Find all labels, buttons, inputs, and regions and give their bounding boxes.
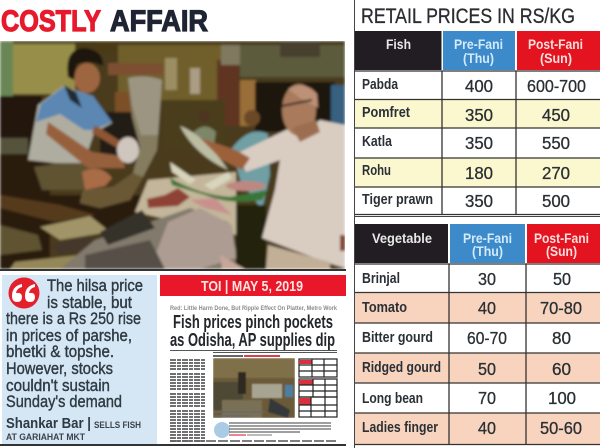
quote panel <box>0 269 346 446</box>
clipping caption <box>214 412 265 416</box>
vegetable table rows: Bitter gourd <box>362 329 433 346</box>
customer head <box>282 84 316 136</box>
big fish on table <box>60 208 236 269</box>
clipping body text column <box>170 360 206 441</box>
vegetable table rows: 60 <box>552 359 571 379</box>
clipping date banner: TOI | MAY 5, 2019 <box>201 278 303 295</box>
vegetable table rows: 50-60 <box>540 418 582 438</box>
fish table header: Post-Fani <box>528 36 583 52</box>
background customers <box>198 110 210 122</box>
vegetable table header: Pre-Fani <box>463 230 512 246</box>
fish table header <box>355 31 600 70</box>
panel: vegetable price table <box>354 216 600 448</box>
floor/slabs <box>0 195 95 222</box>
vegetable table rows <box>355 264 600 445</box>
table <box>135 172 236 235</box>
vegetable table rows: 70-80 <box>540 298 582 318</box>
quote attribution <box>6 415 141 443</box>
vegetable table rows: 80 <box>552 328 571 348</box>
quote attribution: SELLS FISH <box>94 420 141 431</box>
fish table rows: 350 <box>465 105 493 125</box>
fish table rows: 550 <box>542 133 570 153</box>
fish table rows: Rohu <box>362 162 391 179</box>
customer kurta <box>238 120 345 268</box>
vegetable table header <box>355 224 600 263</box>
title <box>1 5 208 38</box>
fish table rows: 400 <box>465 76 493 96</box>
fish table rows: Katla <box>362 133 393 150</box>
seller: arm <box>46 122 125 168</box>
icon: quotation mark <box>8 278 40 308</box>
clipping headline <box>170 311 335 350</box>
fish table rows: Pabda <box>362 76 399 93</box>
quote text: in prices of parshe, <box>6 327 132 345</box>
quote text: couldn't sustain <box>6 377 110 395</box>
clipping mini tables <box>299 359 337 417</box>
vegetable table rows: 40 <box>478 418 496 438</box>
fish table rows: 180 <box>465 163 493 183</box>
vegetable table header: Vegetable <box>372 230 432 246</box>
vegetable table rows: 50 <box>553 269 571 289</box>
fish table rows: 270 <box>542 163 570 183</box>
clipping headline: Fish prices pinch pockets <box>173 311 333 332</box>
vegetable table rows: 50 <box>478 359 496 379</box>
clipping kicker: Red: Little Harm Done, But Ripple Effect On Platter, Metro Work <box>170 305 337 312</box>
fish table rows: Pomfret <box>362 104 410 121</box>
vegetable table header: Post-Fani <box>534 230 589 246</box>
clipping photo <box>213 358 295 418</box>
vegetable table rows: 30 <box>478 269 496 289</box>
seller: shirt <box>28 86 112 163</box>
vegetable table rows: Brinjal <box>362 270 400 287</box>
newspaper clipping panel <box>160 275 346 444</box>
quote text: is stable, but <box>47 294 132 312</box>
quote attribution: AT GARIAHAT MKT <box>6 432 85 443</box>
vegetable table header: (Sun) <box>546 243 577 259</box>
vegetable table rows: 60-70 <box>467 328 507 348</box>
quote text: there is a Rs 250 rise <box>6 310 141 328</box>
photo: fish seller and customer at market <box>0 41 345 269</box>
vegetable table rows: Long bean <box>362 390 423 407</box>
vegetable table header: (Thu) <box>472 243 503 259</box>
held fish <box>180 126 228 170</box>
fish table rows: 600-700 <box>527 76 586 96</box>
clipping headline: as Odisha, AP supplies dip <box>170 329 335 350</box>
seller: trousers <box>33 164 90 192</box>
quote text: Sunday's demand <box>6 393 122 411</box>
fish table header: Pre-Fani <box>454 36 503 52</box>
fish table rows: 450 <box>542 105 570 125</box>
fish table rows: 500 <box>542 191 570 211</box>
fish tray <box>170 178 268 202</box>
vegetable table rows: 100 <box>548 388 576 408</box>
fish table rows <box>355 71 600 215</box>
quote text: However, stocks <box>6 360 113 378</box>
title: AFFAIR <box>110 5 208 38</box>
title: COSTLY <box>1 5 101 38</box>
fish table rows: 350 <box>465 191 493 211</box>
vegetable table rows: 40 <box>478 298 496 318</box>
fish table header: Fish <box>386 36 411 52</box>
quote attribution: Shankar Bar | <box>6 415 91 432</box>
seller: head <box>74 63 100 93</box>
quote text: The hilsa price <box>47 277 143 295</box>
panel: fish price table <box>355 31 600 215</box>
fish table header: (Sun) <box>540 50 572 66</box>
clipping teaser with circle <box>170 422 337 441</box>
quote text: bhetki & topshe. <box>6 343 114 361</box>
fish table header: (Thu) <box>463 50 494 66</box>
vegetable table rows: Tomato <box>362 299 407 316</box>
fish table rows: Tiger prawn <box>362 191 433 208</box>
fish table rows: 350 <box>465 133 493 153</box>
quote text <box>6 277 143 411</box>
vegetable table rows: Ladies finger <box>362 419 438 436</box>
vegetable table rows: 70 <box>478 388 496 408</box>
hanging fish <box>78 91 160 210</box>
clipping date banner <box>160 275 346 296</box>
vegetable table rows: Ridged gourd <box>362 359 441 376</box>
